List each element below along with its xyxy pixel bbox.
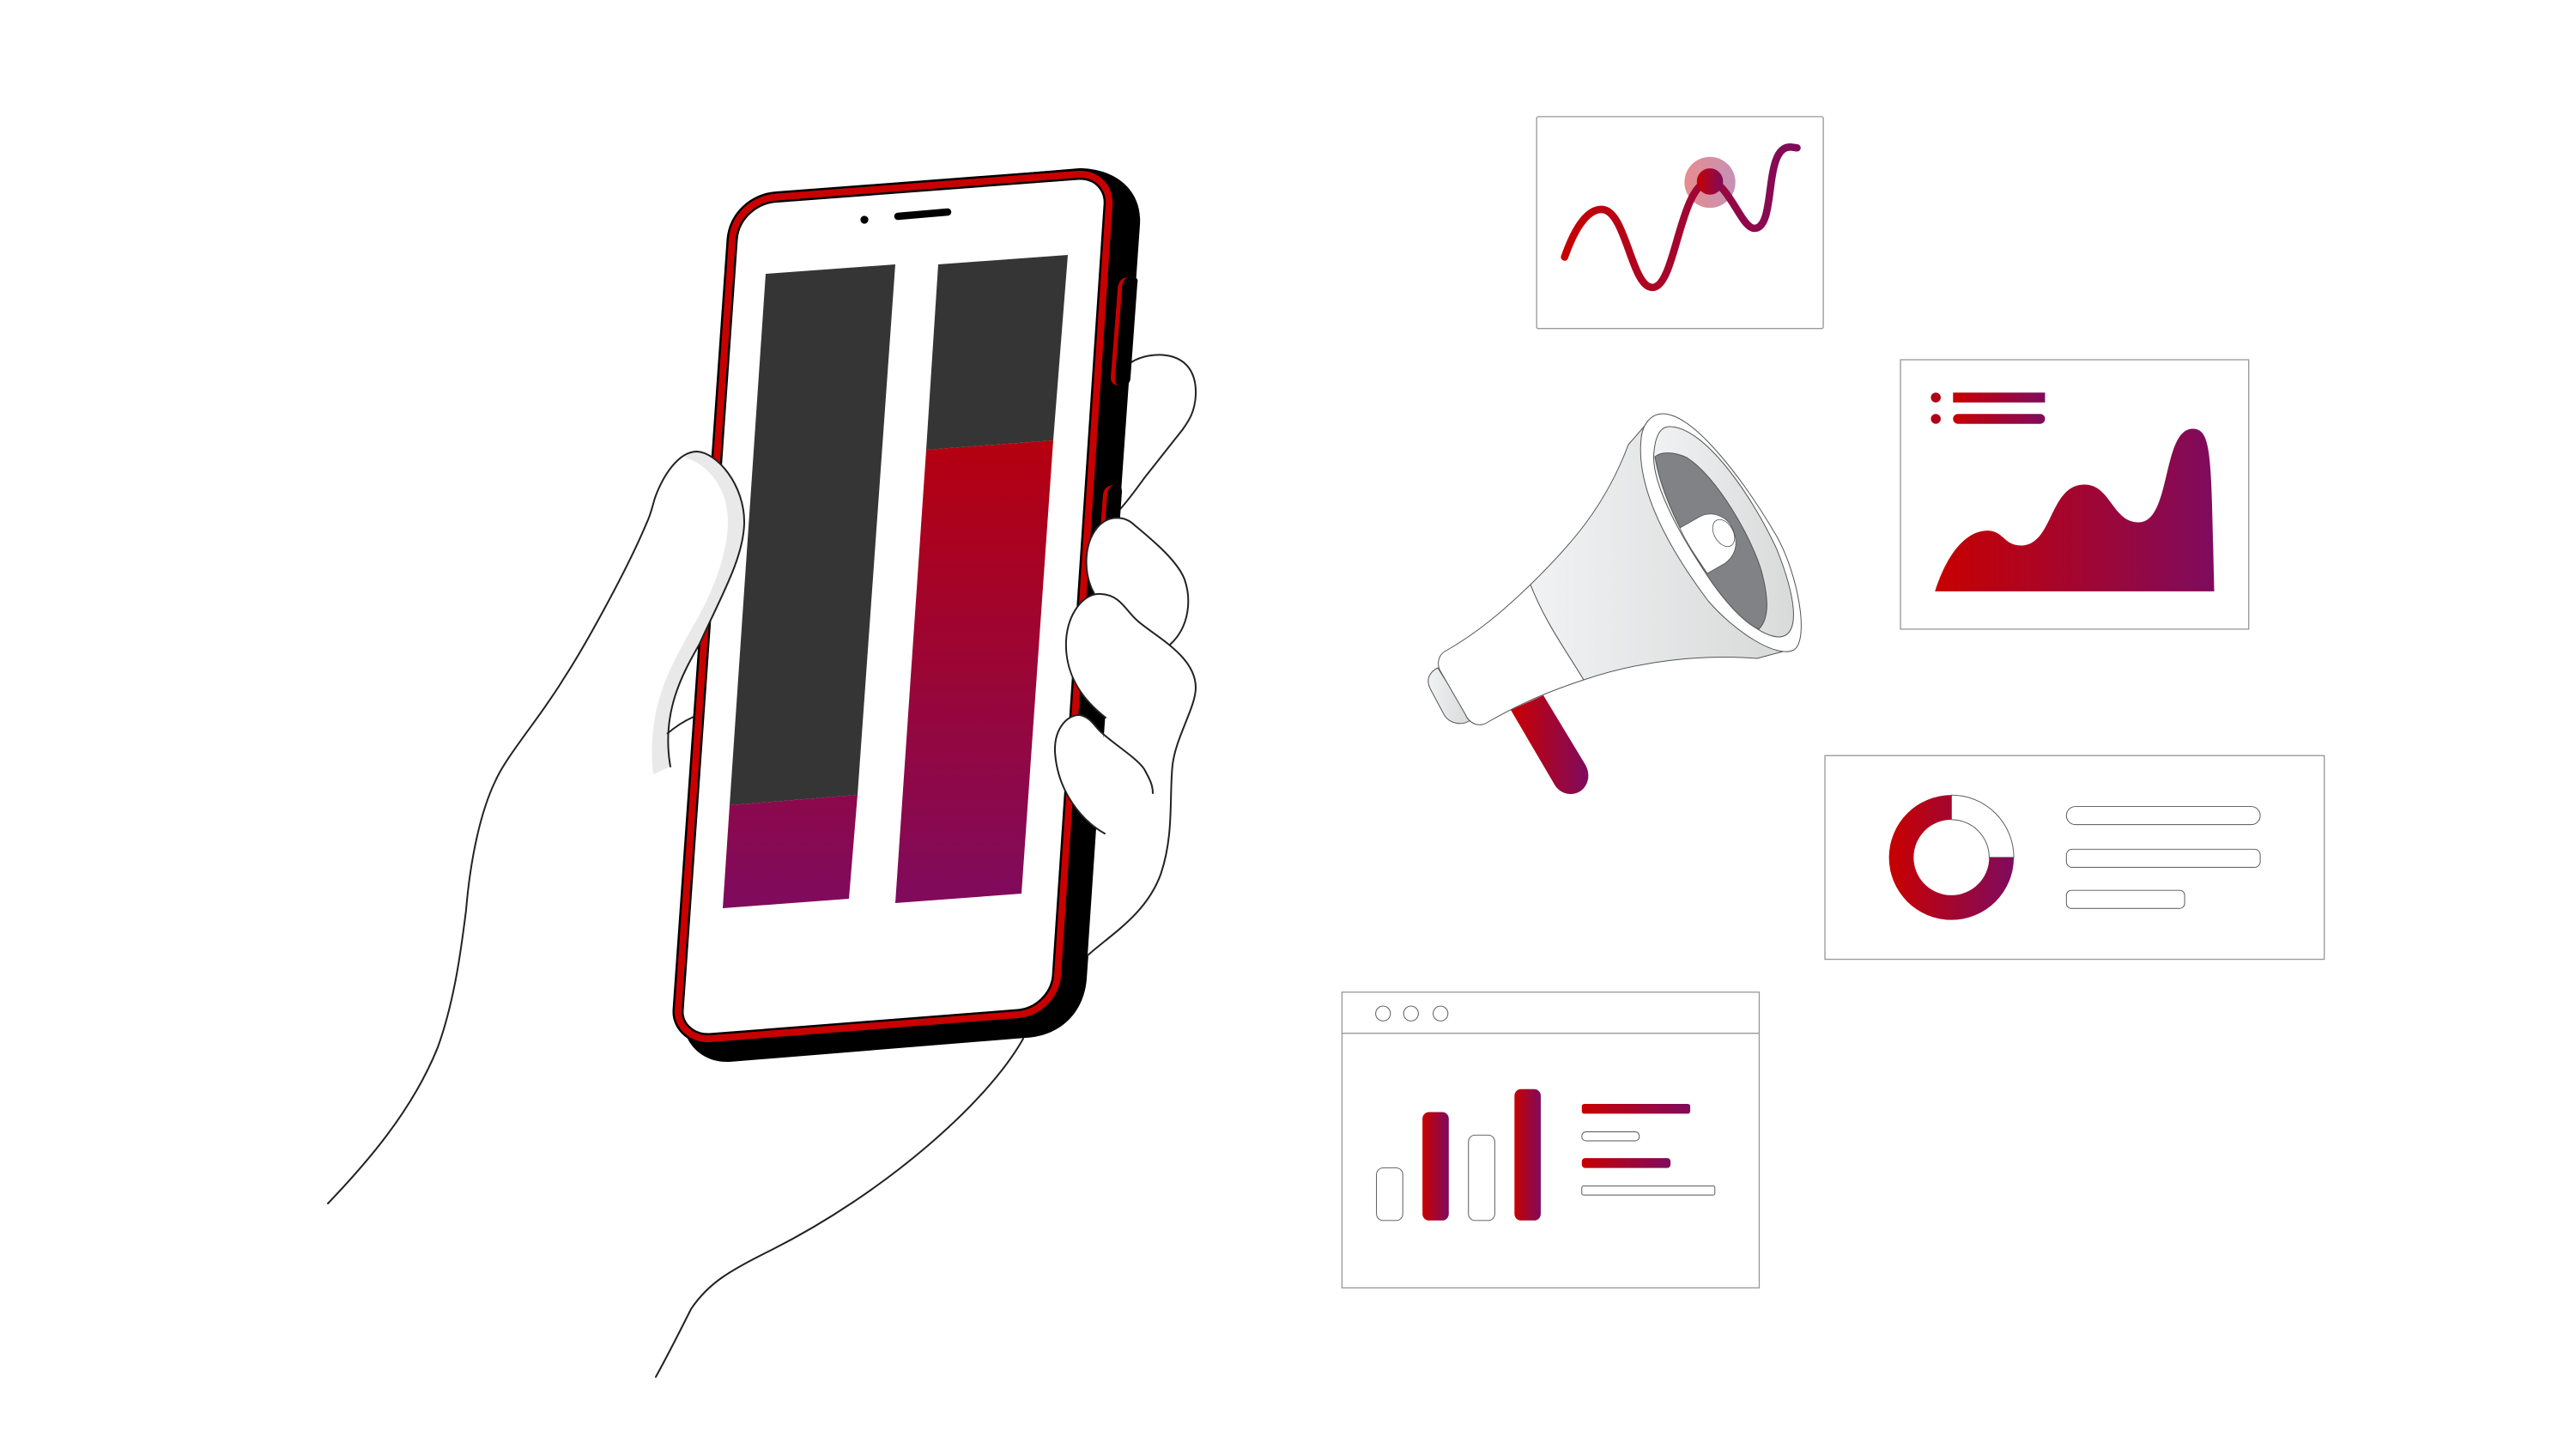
area series — [1935, 428, 2215, 591]
megaphone driver cavity — [1655, 453, 1767, 629]
finger three — [1055, 715, 1153, 834]
megaphone driver opening — [1708, 516, 1739, 550]
line chart card — [1537, 117, 1823, 329]
bar chart browser card — [1342, 992, 1759, 1288]
donut legend bars — [2066, 807, 2260, 908]
legend bars — [1582, 1104, 1715, 1195]
megaphone neck — [1439, 585, 1584, 724]
megaphone handle — [1511, 695, 1588, 794]
donut chart card — [1825, 755, 2324, 960]
donut empty segment — [1951, 795, 2014, 858]
bars — [1377, 1089, 1541, 1221]
left bar on screen — [723, 264, 895, 908]
phone body — [687, 168, 1140, 1062]
hand: thumb — [328, 452, 744, 1203]
highlight point — [1697, 168, 1723, 195]
lower side button — [1100, 485, 1122, 528]
thumb shadow — [652, 452, 744, 774]
window dots — [1376, 1006, 1448, 1021]
line series — [1565, 147, 1797, 288]
thumb outline — [328, 452, 744, 1203]
megaphone rim — [1640, 414, 1801, 652]
phone camera and speaker — [860, 212, 948, 224]
phone — [678, 168, 1140, 1062]
finger two — [1066, 594, 1196, 955]
megaphone — [1428, 414, 1801, 794]
palm line — [667, 717, 694, 734]
donut filled segment — [1889, 795, 2014, 920]
phone frame colour band — [678, 174, 1109, 1039]
finger one — [1087, 518, 1188, 645]
area chart card — [1900, 360, 2249, 629]
right bar on screen — [895, 255, 1068, 903]
chart cards — [1342, 117, 2324, 1288]
megaphone back cap — [1428, 668, 1470, 724]
hand: back finger and wrist — [656, 355, 1196, 1377]
phone frame — [678, 174, 1109, 1039]
megaphone driver — [1680, 514, 1736, 573]
upper side button — [1111, 277, 1137, 385]
megaphone inner cone — [1653, 427, 1793, 637]
hand: fingers — [1055, 518, 1196, 955]
megaphone bell — [1530, 425, 1783, 680]
legend — [1930, 392, 2045, 424]
highlight halo — [1684, 157, 1736, 208]
